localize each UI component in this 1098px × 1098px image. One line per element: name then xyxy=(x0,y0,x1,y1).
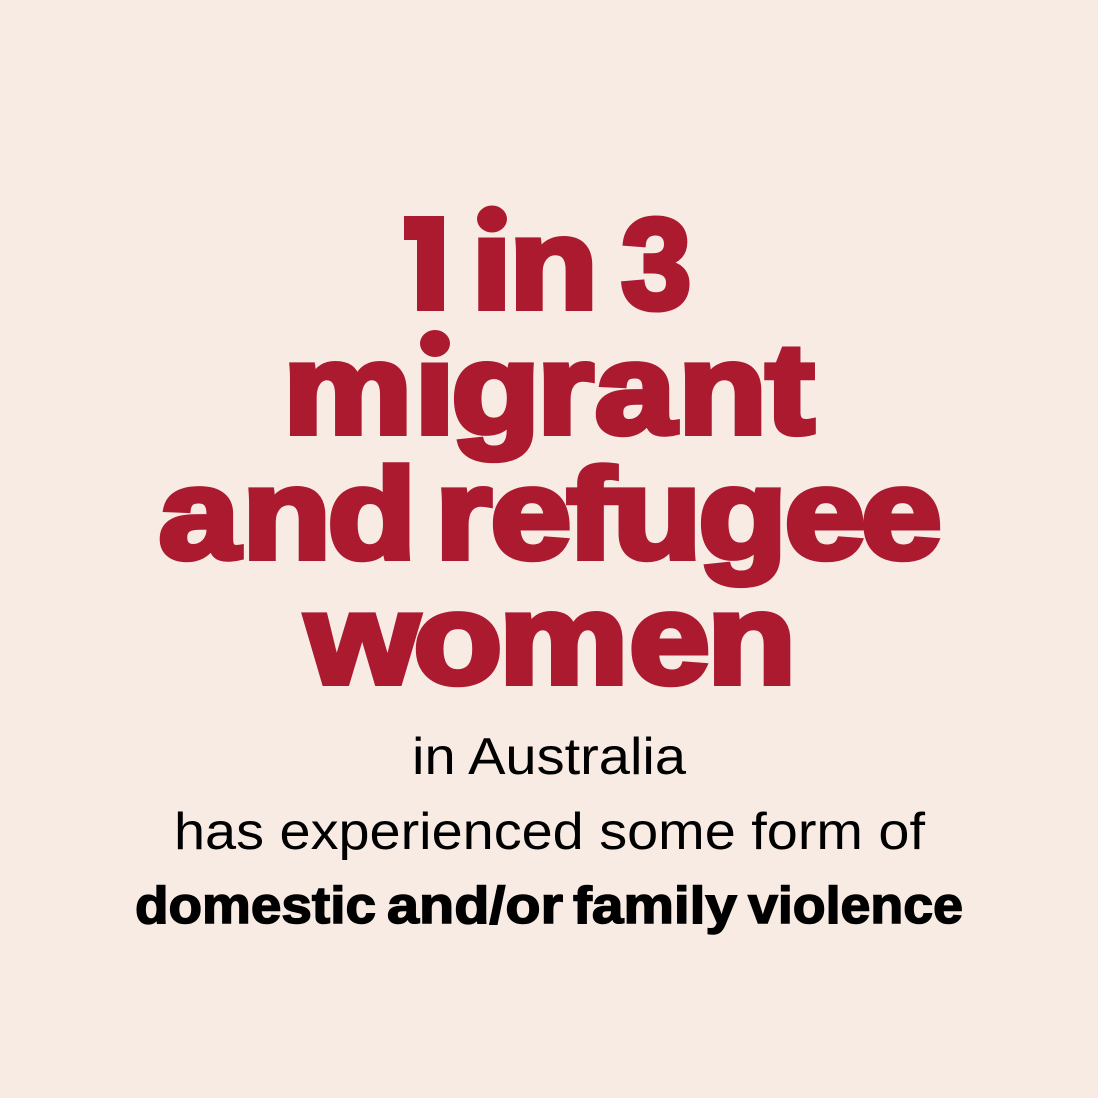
supporting text xyxy=(135,728,963,935)
headline statistic: and xyxy=(159,442,416,585)
headline statistic: migrant xyxy=(283,317,814,460)
infographic canvas xyxy=(136,206,962,935)
headline statistic: 1 xyxy=(390,192,471,335)
supporting text: has experienced some form of xyxy=(174,803,926,861)
round i dots xyxy=(418,200,510,362)
supporting text: domestic xyxy=(135,877,376,935)
headline statistic: women xyxy=(305,567,796,710)
supporting text: violence xyxy=(748,877,963,935)
supporting text: in Australia xyxy=(412,728,686,786)
headline statistic: in xyxy=(472,192,598,335)
headline statistic xyxy=(159,192,942,710)
supporting text: and/or xyxy=(387,877,563,935)
headline statistic: refugee xyxy=(435,442,942,585)
supporting text: family xyxy=(573,877,737,935)
headline statistic: 3 xyxy=(621,192,691,335)
